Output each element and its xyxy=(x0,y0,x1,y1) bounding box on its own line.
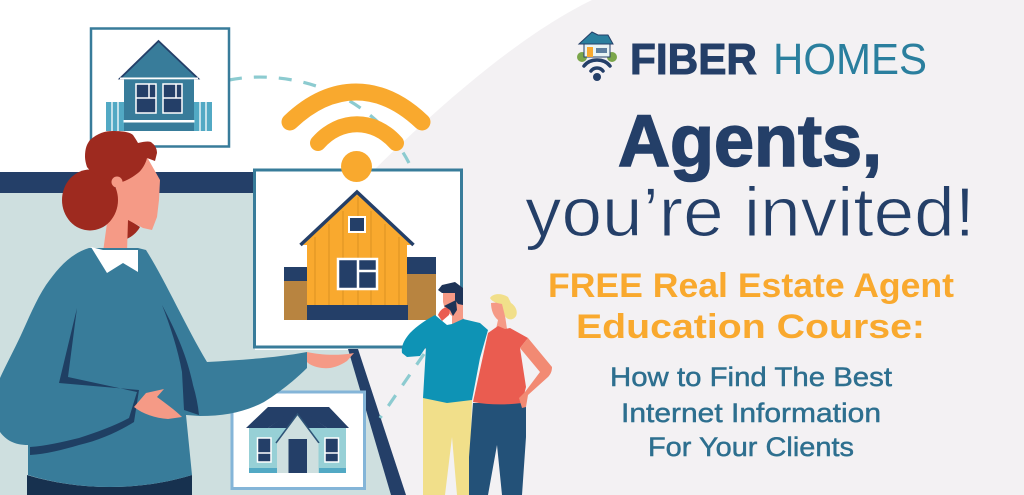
trousers xyxy=(469,403,526,495)
collar xyxy=(91,247,138,273)
neck and face xyxy=(491,302,507,329)
trousers xyxy=(423,398,472,495)
neck and face xyxy=(443,292,467,328)
logo wordmark: homes: HOMES xyxy=(773,36,927,84)
card: orange house xyxy=(254,170,462,347)
sweater left crease xyxy=(30,308,139,455)
logo xyxy=(577,32,927,84)
left hand xyxy=(134,389,182,419)
icon: blue house xyxy=(106,41,212,131)
figure: woman xyxy=(469,294,552,495)
logo wordmark: fiber: FIBER xyxy=(630,36,757,84)
sweater right crease xyxy=(162,305,199,415)
subheading: free course line 2: Education Course: xyxy=(576,308,925,346)
subheading: free course line 1: FREE Real Estate Agent xyxy=(548,267,955,305)
trousers xyxy=(27,475,192,495)
course title text: For Your Clients xyxy=(648,432,854,462)
easel leg xyxy=(348,349,406,495)
arm xyxy=(519,338,552,408)
figure: man xyxy=(402,282,488,495)
dashed connector lines xyxy=(229,77,424,418)
course title text: Internet Information xyxy=(621,398,881,428)
hair top xyxy=(85,131,157,182)
torso and arm xyxy=(402,315,488,403)
background: grey curved panel xyxy=(330,0,1024,495)
icon: light blue house xyxy=(246,407,349,473)
beard xyxy=(444,300,457,316)
hair under chin xyxy=(124,218,140,240)
heading: you're invited: you’re invited! xyxy=(525,173,975,251)
right hand xyxy=(307,352,354,368)
classroom wall panel xyxy=(0,172,396,495)
hair xyxy=(490,294,517,319)
logo icon: house and wifi xyxy=(577,32,617,81)
card: blue house xyxy=(91,28,229,146)
card: light blue house xyxy=(232,392,364,488)
torso xyxy=(473,326,528,404)
hand xyxy=(438,308,450,321)
course title text xyxy=(610,362,893,462)
figure: presenter woman xyxy=(0,131,354,495)
heading: agents: Agents, xyxy=(618,101,882,182)
ear xyxy=(112,176,122,188)
hair xyxy=(438,282,463,305)
course title text: How to Find The Best xyxy=(610,362,893,392)
icon: orange house xyxy=(284,192,436,320)
neck and face xyxy=(103,157,160,252)
hair bun xyxy=(62,170,118,230)
icon: wifi signal xyxy=(290,92,422,182)
sweater xyxy=(0,248,307,487)
